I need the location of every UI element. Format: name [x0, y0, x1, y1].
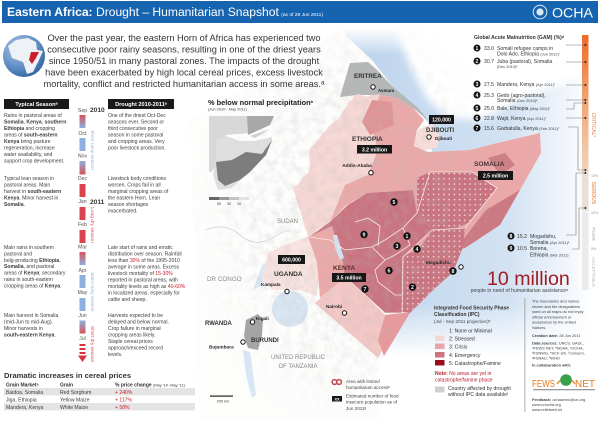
text: drought 2010-2011: delayed and below normal. [108, 320, 169, 326]
GAM list: 2 [476, 59, 479, 65]
IPC legend: Note: No areas are yet in [435, 371, 492, 377]
GAM scale bar [582, 35, 599, 290]
Ethiopia east and Somalia crisis zone [330, 95, 541, 313]
GAM list: Juba (pastoral), Somalia [497, 59, 552, 65]
GAM list: Mandera, Kenya (Apr 2011)ᶠ [497, 82, 555, 88]
text: drought 2010-2011: Livestock body conditions [108, 176, 166, 182]
Kenya west [308, 226, 345, 298]
IPC legend [434, 306, 511, 398]
cereal prices table: Mandera, Kenya [6, 405, 44, 411]
callout: 10 million: 10 million [487, 268, 570, 290]
Emergency zone with limited access: south Somalia [402, 228, 465, 313]
disclaimer and sources: acceptance by the United [532, 320, 576, 324]
IPC legend: 2: Stressed [449, 336, 475, 342]
cereal prices table: Yellow Maize [60, 398, 90, 404]
GAM leader lines [566, 45, 585, 249]
disclaimer and sources [524, 298, 596, 412]
map labels: Djibouti [435, 136, 452, 141]
GAM list: 5 [476, 106, 479, 112]
seasonal timeline: May [78, 290, 88, 296]
map labels: RWANDA [205, 321, 233, 327]
cereal prices table [4, 371, 195, 411]
disclaimer and sources: ᵈFSNWG, ᵉSCF-UK, ᶠConcern, [532, 350, 585, 356]
seasonal timeline: Dec [78, 176, 88, 182]
seasonal timeline: Feb [78, 222, 87, 228]
seasonal timeline: Mar [78, 244, 87, 250]
GAM list: Ethiopia (Mar 2011) [530, 252, 569, 258]
IPC legend: 3: Crisis [449, 344, 468, 350]
population boxes [278, 115, 513, 282]
population boxes: 3.5 million [336, 276, 362, 282]
map labels: SUDAN [277, 219, 298, 225]
text: drought 2010-2011: and cropping areas. Very [108, 139, 165, 145]
GAM list: 33.0 [484, 46, 494, 52]
map labels: ERITREA [354, 73, 382, 80]
GAM heading: Global Acute Malnutrition (GAM) (%)ᵈ [474, 35, 564, 41]
cereal prices table: + 117% [115, 398, 133, 404]
text: typical season: belg-producing Ethiopia, [4, 258, 61, 264]
GAM list: Somali refugee camps in [497, 46, 553, 52]
cereal prices table: Grain Marketᵉ [6, 382, 39, 388]
GAM list: (Dec 2010)ᵉ [497, 64, 518, 69]
seasonal timeline: Nov [78, 154, 88, 160]
text: typical season: Minor harvests in [4, 326, 43, 332]
text: typical season: Kenya. Minor harvest in [4, 196, 59, 202]
map legend: insecure population as of [346, 400, 398, 404]
GAM scale bar: 5% [591, 247, 597, 251]
seasonal timeline: Sep [78, 108, 87, 114]
inset map [209, 116, 274, 190]
intro paragraph: mortality, conflict and restricted humanitarian access in some areas.ᵃ [44, 79, 325, 89]
text: typical season: Somalia. [4, 202, 25, 208]
seasonal timeline: Jan [78, 199, 87, 205]
GAM list: 25.3 [484, 93, 494, 99]
inset legend: 50 [217, 201, 222, 206]
FEWS NET logo: FEWS [532, 378, 555, 390]
population boxes: 3.2 million [362, 148, 387, 154]
map labels: DR CONGO [207, 276, 242, 283]
Ethiopia west [293, 95, 395, 237]
Djibouti [414, 124, 440, 150]
Somalia central patch [488, 153, 515, 175]
seasonal timeline: Main rainy season [89, 273, 95, 312]
text: typical season: harvest in south-eastern [4, 189, 61, 195]
seasonal timeline: Short dry season [89, 326, 95, 362]
text: drought 2010-2011: distribution over season. Rainfall [108, 252, 182, 258]
text: typical season: Main rains in southern [4, 245, 54, 251]
disclaimer and sources: Data sources: UNCS, GAUL, [532, 340, 584, 346]
GAM list [474, 35, 570, 258]
numbered map markers: 5 [393, 200, 396, 206]
capital markers [241, 85, 463, 344]
FEWS NET logo: NET [575, 378, 596, 390]
inset legend [209, 197, 249, 206]
GAM list: 22.8 [484, 116, 494, 122]
text: drought 2010-2011: less than 30% of the 1995-2010 [108, 258, 180, 264]
Lake Victoria [272, 291, 308, 327]
GAM list: 30.7 [484, 59, 494, 65]
text: drought 2010-2011: levels. [108, 352, 122, 358]
inset legend: 10 [237, 201, 242, 206]
map labels: Bujumbura [209, 344, 234, 350]
disclaimer and sources: official endorsement or [532, 314, 572, 319]
disclaimer and sources: In collaboration with: [532, 362, 571, 368]
GAM list: 7 [476, 126, 479, 132]
Ethiopia highlands [362, 100, 394, 135]
IPC legend: (Jul - Sep 2011 projection)ᵉ [434, 319, 491, 324]
text: typical season: Kenya bring pasture [4, 139, 51, 145]
text: drought 2010-2011: cropping areas likely. [108, 332, 155, 338]
text: drought 2010-2011: third consecutive poor [108, 126, 158, 132]
intro paragraph: consecutive poor rainy seasons, resulting in one of the driest years [47, 44, 321, 54]
map labels: ETHIOPIA [352, 136, 383, 143]
map labels: Nairobi [326, 304, 342, 309]
text: drought 2010-2011: seasons ever. Second or [108, 120, 164, 126]
seasonal timeline: Long dry season [89, 207, 95, 243]
population boxes: 120,000 [432, 118, 451, 124]
map [205, 31, 578, 398]
text: typical season: Main harvest in Somalia [4, 313, 59, 319]
text: typical season: Somalia, and pastoral [4, 264, 54, 270]
GAM list: 15.6 [484, 126, 494, 132]
map labels: Kampala [261, 282, 281, 287]
text: typical season: areas of Kenya; secondary [4, 270, 66, 276]
cereal prices table: Grain [60, 382, 73, 388]
GAM list: Somalia (Apr 2011)ᵉ [530, 240, 570, 246]
GAM list: 15.2 [517, 234, 527, 240]
text: typical season: Rains in pastoral areas of [4, 113, 62, 119]
GAM list: 27.5 [484, 82, 494, 88]
GAM scale bar: SERIOUS [590, 182, 596, 205]
seasonal timeline: Jul [79, 336, 86, 342]
text: drought 2010-2011: worsen. Crops fail in all [108, 182, 161, 188]
inset legend: 30 [227, 201, 232, 206]
river [205, 227, 290, 242]
header band [2, 1, 598, 23]
column header: typical season [4, 99, 69, 109]
arrow: continuing dry season [78, 344, 87, 362]
text: drought 2010-2011: Staple cereal prices [108, 339, 153, 345]
text: drought 2010-2011: Harvests expected to be [108, 313, 163, 319]
column header: drought: Drought 2010-2011ᵃ [115, 102, 168, 108]
cereal prices table: Jiga, Ethiopia [6, 398, 37, 404]
IPC legend: catastrophe/famine phase [435, 378, 493, 384]
numbered map markers: 7 [364, 287, 367, 293]
GAM list: 9 [510, 246, 513, 252]
land base [190, 30, 541, 420]
text: typical season: regeneration, increase [4, 146, 55, 152]
text: typical season: (mid-Jun to mid-Aug). [4, 320, 53, 326]
text: drought 2010-2011: season in some pastoral [108, 132, 163, 138]
population boxes: 600,000 [282, 258, 301, 264]
GAM list: 8 [510, 234, 513, 240]
text: drought 2010-2011: One of the driest Oct-Dec [108, 113, 166, 119]
seasonal timeline: Short rainy season [89, 130, 95, 170]
Uganda [262, 237, 320, 296]
text: typical season: Ethiopia and cropping [4, 126, 55, 132]
map labels: Kigali [256, 316, 269, 321]
seasonal timeline: Jun [78, 313, 87, 319]
disclaimer and sources: used on all maps do not imply [532, 309, 584, 314]
text: typical season: south-eastern Kenya. [4, 332, 56, 338]
disclaimer and sources: Nations. [532, 325, 546, 330]
map labels: Asmara [378, 88, 395, 93]
text: drought 2010-2011: poor livestock production. [108, 146, 166, 152]
GAM list: 10.5 [517, 246, 527, 252]
text: drought 2010-2011: season shortages [108, 202, 149, 208]
GAM list: Mogadishu, [530, 234, 556, 240]
IPC legend: Classification (IPC) [434, 312, 480, 318]
scale bar: 200 km [217, 398, 229, 404]
FEWS NET logo [532, 374, 596, 390]
GAM scale bar: ACCEPTABLE [591, 257, 596, 287]
sea [345, 20, 600, 363]
text: typical season: support crop development. [4, 158, 64, 164]
text: drought 2010-2011: the eastern Horn. Lean [108, 196, 160, 202]
map labels: UGANDA [274, 271, 303, 278]
globe icon [3, 35, 45, 77]
Lake Albert [253, 262, 268, 290]
map legend: Jun 2011ᵍ [346, 406, 367, 411]
cereal prices table: + 240% [115, 390, 133, 396]
map labels [205, 73, 505, 370]
IPC legend: 4: Emergency [449, 353, 481, 359]
Kenya coast [378, 313, 410, 356]
cereal prices table: White Maize [60, 405, 88, 411]
map labels: SOMALIA [474, 161, 505, 168]
map labels: Addis-Ababa [342, 163, 372, 169]
inset heading: % below normal precipitation [208, 98, 311, 107]
map labels: KENYA [333, 265, 355, 272]
map legend [332, 379, 399, 411]
disclaimer and sources: ᵍFSNAU, ʰWHO [532, 356, 560, 360]
map labels: OF TANZANIA [278, 364, 318, 370]
dot pattern: Ogaden [417, 172, 497, 232]
GAM list: 25.0 [484, 106, 494, 112]
inset: % below normal precipitation [208, 98, 314, 206]
map legend: Area with limited [346, 379, 380, 384]
Emergency zone: southern Ethiopia and north Kenya [309, 190, 433, 313]
text: drought 2010-2011: approach/exceed record [108, 346, 163, 352]
population boxes: 2.5 million [483, 174, 508, 180]
map legend: humanitarian accessᵉ [346, 385, 390, 390]
GAM list: Garbatulla, Kenya (Feb 2011)ᶠ [497, 126, 559, 132]
column header: typical season: Typical Seasonᵃ [15, 102, 59, 108]
GAM list: Wajir, Kenya (Apr 2011)ᶠ [497, 116, 546, 122]
GAM list: Somalia (Dec 2010)ᵉ [497, 98, 538, 104]
map labels: UNITED REPUBLIC [271, 355, 326, 361]
seasonal timeline: 2011 [90, 199, 105, 206]
GAM list: 6 [476, 116, 479, 122]
text: typical season: Somalia, Kenya, southern [4, 120, 66, 126]
text: drought 2010-2011 [108, 113, 186, 358]
scale bar [210, 396, 233, 404]
inset: % below normal precipitation: (Jun 2010 - May 2011) [208, 106, 248, 112]
dot pattern: south Somalia [402, 228, 465, 313]
seasonal timeline: Oct [78, 131, 87, 137]
GAM scale bar: CRITICAL* [590, 113, 596, 137]
text: typical season: pastoral and [4, 252, 32, 258]
seasonal timeline: 2010 [90, 107, 105, 114]
numbered map markers: 9 [363, 232, 366, 238]
Lake Turkana [333, 235, 344, 260]
intro paragraph: have been exacerbated by high local cereal prices, excess livestock [45, 68, 323, 78]
text: drought 2010-2011: marginal cropping areas of [108, 189, 169, 195]
GAM list: 4 [476, 93, 479, 99]
table heading: Dramatic increases in cereal prices [4, 371, 131, 380]
Lake Tanganyika [243, 350, 256, 398]
text: drought 2010-2011: livestock mortality of 15-30% [108, 271, 173, 277]
cereal prices table: % price change (May '10- May '11) [115, 382, 185, 388]
cereal prices table: Red Sorghum [60, 390, 91, 396]
text: typical season [4, 113, 66, 338]
GAM list: Borena, [530, 246, 548, 252]
disclaimer and sources: Creation date: 28 Jun 2011 [532, 333, 580, 338]
text: typical season: pastoral areas. Main [4, 182, 50, 188]
numbered map markers: 8 [452, 269, 455, 275]
IPC legend: without IPC data availableᶠ [448, 392, 509, 398]
text: typical season: areas of south-eastern [4, 132, 58, 138]
OCHA logo: OCHA [552, 6, 594, 22]
inset heading: b [311, 99, 314, 104]
numbered map markers: 3 [396, 244, 399, 250]
disclaimer and sources: www.reliefweb.int [532, 407, 563, 412]
IPC legend: Integrated Food Security Phase [434, 306, 509, 312]
text: drought 2010-2011: mortality levels as high as 40-60% [108, 284, 186, 290]
GAM list: Bale, Ethiopia (May 2011)ᶠ [497, 106, 550, 112]
disclaimer and sources: ᵃFEWS NET, ᵇNOAA, ᶜOCHA, [532, 346, 584, 350]
disclaimer and sources: The boundaries and names [532, 298, 579, 304]
cereal prices table: + 58% [115, 405, 130, 411]
map labels: Mogadishu [426, 260, 451, 265]
map labels: DJIBOUTI [426, 128, 454, 134]
seasonal timeline: Apr [78, 268, 87, 274]
IPC legend: Country affected by drought [448, 386, 511, 392]
disclaimer and sources: www.unocha.org [532, 402, 561, 407]
text: drought 2010-2011: in localized areas, especially for [108, 290, 180, 296]
text: drought 2010-2011: cattle and sheep. [108, 297, 147, 303]
numbered map markers: 1 [406, 234, 409, 240]
GAM scale bar: 10% [591, 211, 599, 215]
map labels: BURUNDI [251, 338, 279, 344]
map legend: XX [334, 396, 340, 401]
numbered map markers: 2 [411, 285, 414, 291]
Somalia coastal patch [455, 190, 520, 250]
intro paragraph: Over the past year, the eastern Horn of Africa has experienced two [47, 33, 321, 43]
title: Eastern Africa: Drought – Humanitarian Snapshot (as of 28 Jun 2011) [7, 5, 323, 19]
text: drought 2010-2011: Crop failure in marginal [108, 326, 161, 332]
cereal prices table: Baidoa, Somalia [6, 390, 43, 396]
GAM list: 1 [476, 46, 479, 52]
text: drought 2010-2011: exacerbated. [108, 208, 137, 214]
Eritrea [340, 62, 428, 120]
numbered map markers [360, 198, 457, 293]
OCHA logo [533, 5, 594, 21]
intro paragraph: since 1950/51 in many pastoral zones. The impacts of the drought [49, 56, 320, 66]
disclaimer and sources: shown and the designations [532, 304, 580, 309]
text: typical season: cropping areas of Kenya. [4, 284, 62, 290]
Kenya south [315, 277, 400, 358]
text: drought 2010-2011: reported in pastoral areas, with [108, 278, 178, 284]
Rwanda and Burundi [244, 314, 263, 350]
intro paragraph [44, 33, 325, 89]
text: drought 2010-2011: Late start of rains and erratic [108, 245, 173, 251]
text: typical season: rains in south-eastern [4, 277, 53, 283]
GAM scale bar: 15% [591, 174, 599, 178]
text: typical season: water availability, and [4, 152, 52, 158]
numbered map markers: 4 [416, 247, 419, 253]
IPC legend: 1: None or Minimal [449, 328, 492, 334]
disclaimer and sources: Feedback: ochaavmu@un.org [532, 397, 585, 402]
callout: 10 million: people in need of humanitarian assistanceᵃ [471, 288, 568, 294]
numbered map markers: 6 [388, 268, 391, 274]
column header: drought [108, 99, 174, 109]
GAM list: Dolo Ado, Ethiopia (Jun 2011)ᶠ [497, 52, 560, 58]
GAM list: Gedo (agro-pastoral), [497, 93, 546, 99]
map legend: Estimated number of food [346, 394, 399, 398]
IPC legend: 5: Catastrophe/Famine [449, 361, 501, 367]
seasonal timeline [78, 107, 105, 362]
GAM list: 3 [476, 82, 479, 88]
Emergency zone with limited access: Ogaden [417, 172, 497, 232]
text: drought 2010-2011: average in some areas. Excess [108, 264, 180, 270]
text: typical season: Typical lean season in [4, 176, 54, 182]
GAM scale bar: POOR [591, 227, 596, 241]
